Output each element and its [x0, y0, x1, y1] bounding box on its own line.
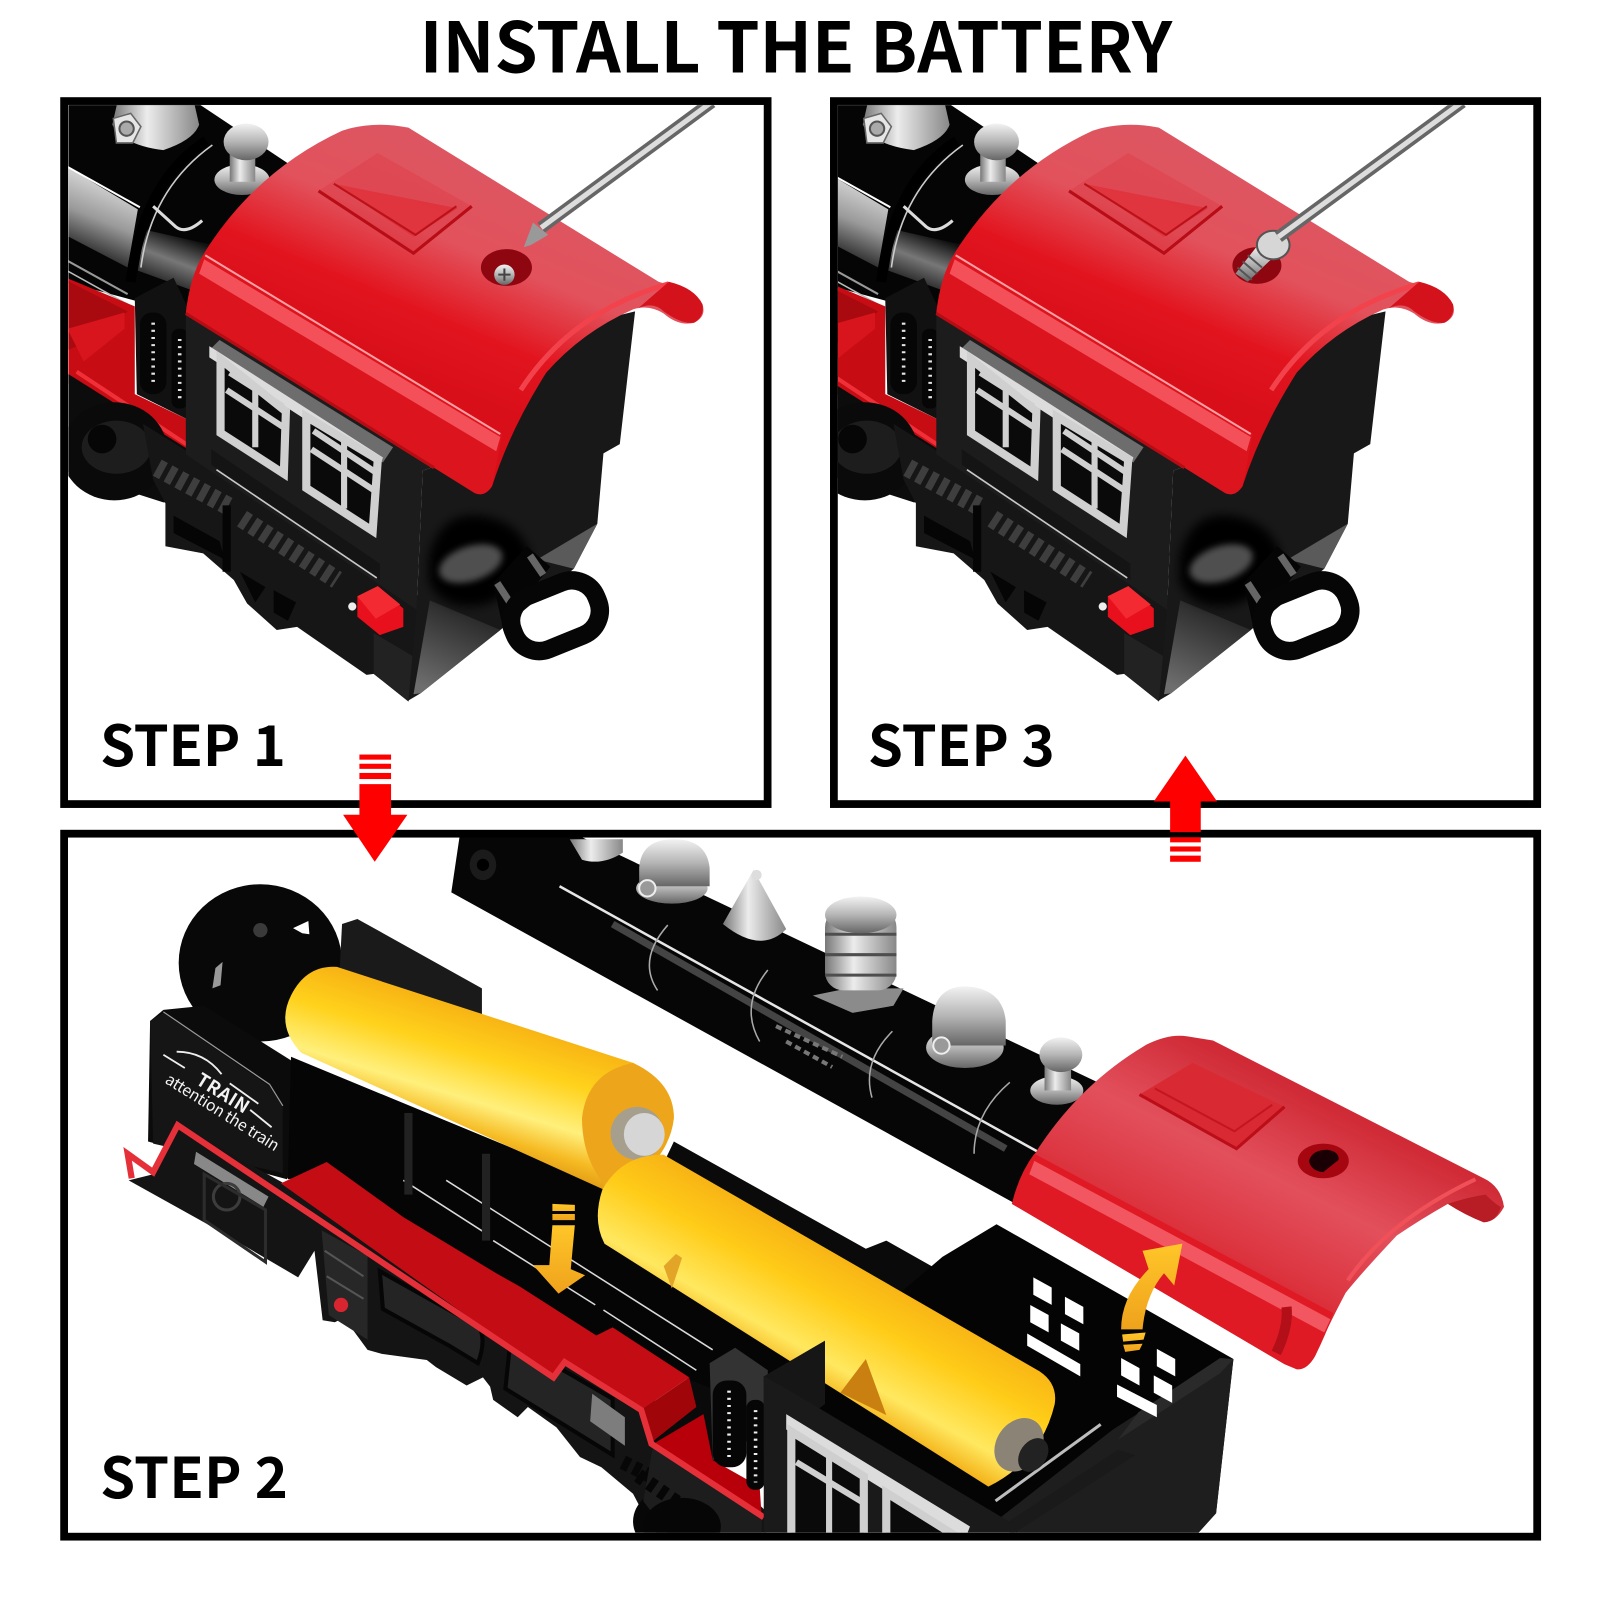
label: step 1: STEP 1 [100, 702, 286, 783]
panel: step 1 [61, 101, 768, 804]
train cab illustration, step 3 [812, 102, 1454, 701]
icon: yellow curved arrow up [1121, 1244, 1182, 1352]
silver boiler fittings [570, 839, 1083, 1105]
red deck [281, 1162, 762, 1517]
raised screw in roof hole [1232, 231, 1290, 284]
label: step 3: STEP 3 [868, 702, 1055, 783]
train with roof removed [128, 837, 1504, 1556]
front plate [148, 1006, 291, 1180]
block behind battery [337, 919, 482, 1021]
train cab illustration, step 1 [61, 102, 704, 701]
front plate lettering: attention the train [161, 1067, 284, 1156]
screwdriver [1278, 102, 1462, 237]
spring block [710, 1348, 768, 1490]
boiler [451, 837, 1098, 1207]
battery tray rails [288, 1057, 807, 1394]
wall window panes [1027, 1277, 1175, 1417]
front cab wall [764, 1340, 1016, 1533]
lower chassis [128, 1148, 766, 1533]
screwdriver [524, 102, 712, 247]
panel: step 3 [812, 101, 1537, 804]
icon: yellow arrow down [533, 1204, 585, 1294]
frame [64, 101, 768, 804]
battery: lower [598, 1155, 1055, 1487]
arrow: step 2 to step 3 [1154, 756, 1217, 862]
screw in roof hole [481, 249, 532, 286]
frame [834, 101, 1537, 804]
arrow: step 1 to step 2 [343, 755, 407, 862]
front plate lettering: TRAIN [192, 1066, 255, 1119]
red rail trim [128, 1125, 764, 1517]
panel: step 2 [64, 834, 1537, 1556]
removed roof [1012, 1036, 1504, 1369]
battery: upper [285, 967, 674, 1194]
label: step 2: STEP 2 [100, 1434, 288, 1515]
rear cab wall [776, 1224, 1233, 1534]
black tray behind second battery [666, 1142, 932, 1292]
frame [64, 834, 1537, 1537]
smoke box disc [179, 884, 342, 1041]
